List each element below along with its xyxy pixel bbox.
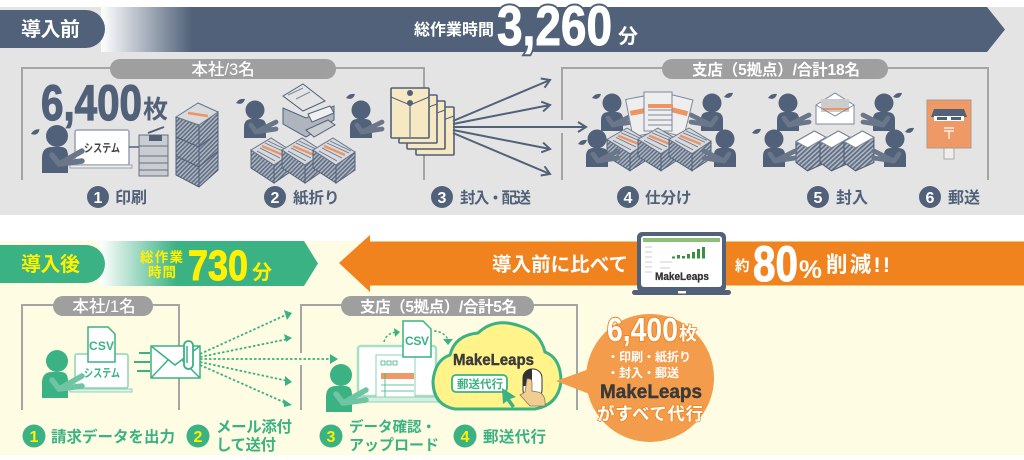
label: branch staff bbox=[662, 59, 888, 79]
label: branch after: 支店（5拠点）/合計5名 bbox=[360, 297, 517, 316]
banner: after arrow: 総作業 bbox=[140, 249, 184, 265]
steps: before process: 紙折り bbox=[293, 189, 340, 207]
arrows: distribution bbox=[453, 80, 586, 174]
illustration: data upload bbox=[326, 321, 453, 412]
illustration: enclosing step bbox=[752, 93, 914, 171]
steps: after process: 請求データを出力 bbox=[51, 427, 175, 446]
banner: before arrow: 導入前 bbox=[21, 17, 80, 41]
steps: after process: 1 bbox=[30, 429, 39, 446]
banner: after arrow: 分 bbox=[252, 261, 272, 284]
steps: before process: 郵送 bbox=[948, 189, 980, 207]
label: head office after bbox=[53, 296, 153, 316]
icon: MakeLeaps cloud: 郵送代行 bbox=[457, 377, 504, 391]
illustration: sorting step bbox=[578, 92, 736, 171]
steps: before process: 封入 bbox=[836, 189, 868, 207]
banner: after arrow: 導入後 bbox=[21, 252, 80, 276]
steps: after process: メール添付 bbox=[216, 418, 292, 436]
icon: mail with attachment bbox=[134, 341, 200, 378]
steps: before process: 5 bbox=[814, 190, 823, 207]
banner: before arrow: 総作業時間 bbox=[414, 21, 494, 39]
steps: before process: 3 bbox=[438, 190, 447, 207]
callout: MakeLeaps substitute: ・紙折り bbox=[643, 349, 691, 364]
icon: MakeLeaps cloud bbox=[433, 323, 561, 409]
banner: before arrow: 分 bbox=[618, 25, 638, 48]
callout: MakeLeaps substitute bbox=[556, 311, 714, 442]
frame: branch before bbox=[562, 68, 988, 180]
steps: before process: 印刷 bbox=[115, 188, 147, 207]
frame: branch after bbox=[301, 305, 577, 410]
banner: reduction arrow: 約 bbox=[735, 258, 750, 275]
steps: before process bbox=[87, 186, 980, 208]
steps: after process: 4 bbox=[461, 429, 470, 446]
steps: after process: データ確認・ bbox=[349, 418, 436, 436]
frame: head office after bbox=[22, 305, 179, 410]
icon: postbox bbox=[927, 100, 971, 159]
arrows: dotted distribution bbox=[200, 310, 338, 407]
banner: after arrow bbox=[0, 241, 318, 290]
panel: before background bbox=[0, 7, 1024, 215]
banner: reduction arrow: 削減!! bbox=[826, 253, 890, 277]
label: branch staff: 支店（5拠点）/合計18名 bbox=[692, 60, 860, 79]
steps: after process bbox=[22, 418, 546, 454]
banner: reduction arrow: % bbox=[799, 256, 822, 284]
number: 6,400 sheets: 6,400 bbox=[41, 75, 142, 131]
icon: MakeLeaps cloud: MakeLeaps bbox=[453, 352, 534, 369]
steps: after process: 2 bbox=[194, 429, 203, 446]
illustration: fold step bbox=[236, 84, 382, 183]
callout: MakeLeaps substitute: がすべて代行 bbox=[597, 404, 703, 424]
banner: before arrow bbox=[0, 0, 1005, 57]
callout: MakeLeaps substitute: ・封入 bbox=[607, 365, 643, 380]
steps: before process: 2 bbox=[271, 190, 280, 207]
label: head office staff bbox=[110, 59, 336, 79]
banner: after arrow: 時間 bbox=[148, 264, 176, 280]
illustration: print step: システム bbox=[84, 142, 120, 155]
illustration: system output: CSV bbox=[89, 339, 114, 353]
number: 6,400 sheets: 枚 bbox=[143, 96, 168, 124]
label: head office staff: 本社/3名 bbox=[191, 60, 255, 79]
callout: MakeLeaps substitute: ・郵送 bbox=[643, 365, 679, 380]
panel: after background bbox=[0, 241, 1024, 455]
label: branch after bbox=[341, 296, 534, 316]
banner: reduction arrow: 80 bbox=[753, 236, 798, 292]
frame: head office before bbox=[22, 68, 424, 180]
steps: before process: 6 bbox=[926, 190, 935, 207]
illustration: print step bbox=[31, 103, 218, 187]
banner: reduction arrow: 導入前に比べて bbox=[492, 253, 628, 276]
steps: before process: 1 bbox=[94, 190, 103, 207]
callout: MakeLeaps substitute: ・印刷 bbox=[607, 349, 643, 364]
illustration: system output bbox=[42, 327, 132, 398]
steps: before process: 封入・配送 bbox=[460, 189, 531, 207]
steps: after process: 郵送代行 bbox=[483, 428, 546, 446]
banner: reduction arrow bbox=[339, 235, 1024, 292]
illustration: system output: システム bbox=[84, 367, 120, 380]
steps: after process: アップロード bbox=[349, 437, 439, 454]
steps: after process: 3 bbox=[327, 429, 336, 446]
illustration: data upload: CSV bbox=[405, 334, 429, 348]
banner: after arrow: 730 bbox=[188, 242, 248, 290]
steps: before process: 4 bbox=[624, 190, 633, 207]
label: head office after: 本社/1名 bbox=[72, 297, 136, 316]
callout: MakeLeaps substitute: MakeLeaps bbox=[600, 382, 702, 403]
callout: MakeLeaps substitute: 6,400 bbox=[607, 311, 678, 348]
icon: laptop with MakeLeaps: MakeLeaps bbox=[655, 271, 709, 283]
illustration: envelopes bbox=[391, 88, 454, 155]
steps: before process: 仕分け bbox=[645, 189, 692, 207]
icon: laptop with MakeLeaps bbox=[632, 232, 731, 295]
callout: MakeLeaps substitute: 枚 bbox=[679, 324, 697, 344]
steps: after process: して送付 bbox=[216, 436, 276, 454]
